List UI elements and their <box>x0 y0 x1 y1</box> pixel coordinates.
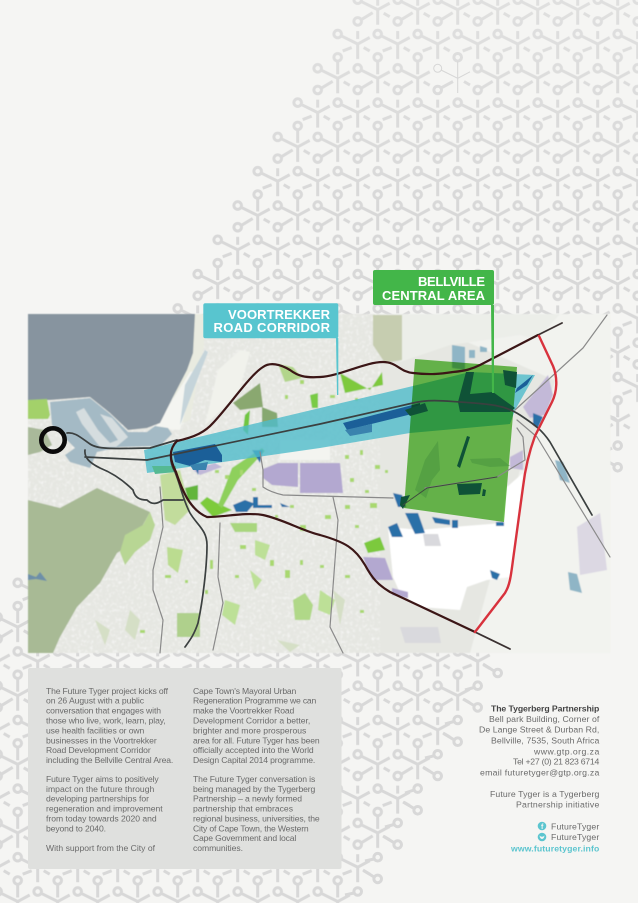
label: bellville central area: CENTRAL AREA <box>382 288 486 303</box>
right column text: Development Corridor a better, <box>193 715 310 725</box>
white open area <box>388 473 523 610</box>
left column text: businesses in the Voortrekker <box>46 735 157 745</box>
green patches and mountains <box>28 399 50 419</box>
contact details: www.futuretyger.info <box>510 844 599 854</box>
map <box>28 314 610 653</box>
small parks scattered through suburbs <box>140 380 388 633</box>
label: voortrekker road corridor: ROAD CORRIDOR <box>214 320 331 335</box>
left column text: developing partnerships for <box>46 794 149 804</box>
contact details: Bell park Building, Corner of <box>489 714 600 724</box>
icon: facebook: f <box>541 824 544 831</box>
left column text: including the Bellville Central Area. <box>46 755 173 765</box>
harbour <box>50 398 172 468</box>
contact details: FutureTyger <box>551 822 599 832</box>
right column text: being managed by the Tygerberg <box>193 784 316 794</box>
contact details: Partnership initiative <box>516 800 599 810</box>
contact details: www.gtp.org.za <box>533 747 599 757</box>
right column text: partnership that embraces <box>193 804 293 814</box>
label: voortrekker road corridor: VOORTREKKER <box>228 307 331 322</box>
right column text: City of Cape Town, the Western <box>193 823 309 833</box>
bellville block details <box>400 370 517 509</box>
icon: facebook <box>538 822 546 831</box>
label: voortrekker road corridor <box>203 303 338 395</box>
left column text: conversation that engages with <box>46 706 161 716</box>
icon: twitter <box>538 833 546 841</box>
right column text: make the Voortrekker Road <box>193 706 295 716</box>
left column text: With support from the City of <box>46 843 156 853</box>
voortrekker road corridor band <box>144 372 535 473</box>
blue blocks <box>388 413 543 580</box>
right column text: Cape Town's Mayoral Urban <box>193 686 297 696</box>
bay <box>28 314 195 430</box>
right column text: Design Capital 2014 programme. <box>193 755 315 765</box>
corridor dark blue blocks <box>152 375 533 474</box>
left column text: impact on the future through <box>46 784 155 794</box>
right column text: regional business, universities, the <box>193 814 320 824</box>
lilac blocks <box>263 463 408 598</box>
left column text: on 26 August with a public <box>46 696 145 706</box>
contact details: De Lange Street & Durban Rd, <box>479 725 599 735</box>
left column text: beyond to 2040. <box>46 823 106 833</box>
left column text: those who live, work, learn, play, <box>46 715 166 725</box>
right column text: Partnership – a newly formed <box>193 794 302 804</box>
right column text: officially accepted into the World <box>193 745 314 755</box>
contact details <box>479 704 600 854</box>
contact details: email futuretyger@gtp.org.za <box>480 768 599 778</box>
text panel <box>28 668 342 869</box>
contact details: The Tygerberg Partnership <box>491 704 599 714</box>
left column text: use health facilities or own <box>46 725 145 735</box>
left column text: regeneration and improvement <box>46 804 163 814</box>
contact details: Bellville, 7535, South Africa <box>491 736 599 746</box>
left column text: Road Development Corridor <box>46 745 151 755</box>
map base land <box>28 314 610 653</box>
left column text <box>46 686 173 853</box>
left column text: from today towards 2020 and <box>46 814 157 824</box>
right column text: The Future Tyger conversation is <box>193 774 315 784</box>
left column text: Future Tyger aims to positively <box>46 774 159 784</box>
right column text <box>193 686 320 853</box>
contact details: FutureTyger <box>551 832 599 842</box>
city centre ring marker <box>41 428 65 452</box>
bellville central area block <box>404 359 517 522</box>
label: bellville central area: BELLVILLE <box>418 274 485 289</box>
contact details: Future Tyger is a Tygerberg <box>490 789 599 799</box>
label: bellville central area <box>373 270 494 393</box>
right column text: area for all. Future Tyger has been <box>193 735 320 745</box>
right column text: communities. <box>193 843 243 853</box>
contact details: Tel +27 (0) 21 823 6714 <box>513 757 599 767</box>
right column text: Cape Government and local <box>193 833 296 843</box>
left column text: The Future Tyger project kicks off <box>46 686 169 696</box>
right column text: brighter and more prosperous <box>193 725 306 735</box>
right column text: Regeneration Programme we can <box>193 696 317 706</box>
road and rail network <box>67 315 610 653</box>
